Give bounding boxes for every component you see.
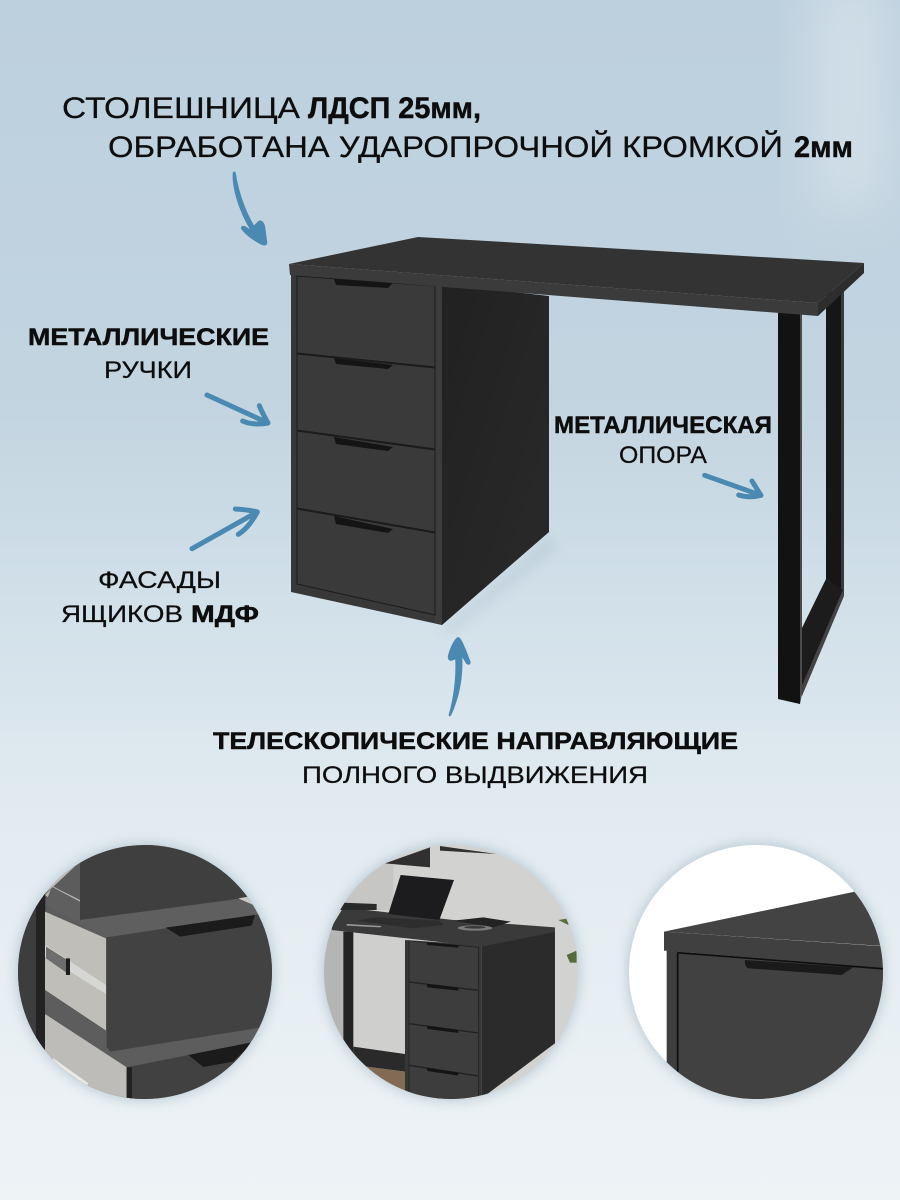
- label: telescopic slides: ТЕЛЕСКОПИЧЕСКИЕ НАПРАВЛЯЮЩИЕ: [213, 728, 738, 755]
- label: telescopic slides: ПОЛНОГО ВЫДВИЖЕНИЯ: [302, 762, 648, 789]
- title: [62, 92, 853, 164]
- title: СТОЛЕШНИЦА: [62, 92, 300, 125]
- drawers: [297, 276, 435, 615]
- label: metal support: МЕТАЛЛИЧЕСКАЯ: [554, 412, 772, 439]
- arrow: tabletop: [233, 171, 267, 245]
- label: telescopic slides: [213, 728, 738, 789]
- circle: handle close-up: [622, 838, 890, 1106]
- label: drawer fronts: ФАСАДЫ: [98, 567, 221, 594]
- label: drawer fronts: ЯЩИКОВ: [61, 601, 183, 628]
- tabletop front edge: [289, 264, 818, 316]
- back leg: [826, 288, 844, 595]
- drawer 3: [297, 431, 435, 532]
- drawer 4: [297, 509, 435, 615]
- label: drawer fronts: МДФ: [191, 601, 259, 628]
- label: metal handles: [28, 324, 269, 384]
- tabletop side edge: [818, 263, 864, 316]
- desk: [289, 237, 864, 704]
- soft shadow: [442, 535, 556, 634]
- arrow: drawer fronts: [192, 509, 257, 549]
- front leg: [778, 312, 802, 704]
- leg bottom bar: [800, 579, 843, 692]
- handles: [334, 279, 393, 533]
- drawer 1: [297, 276, 435, 367]
- arrow: support: [705, 475, 761, 497]
- title: 2мм: [794, 131, 853, 164]
- drawer 2: [297, 354, 435, 449]
- tabletop surface: [289, 237, 864, 303]
- circle: desk in interior: [317, 838, 585, 1106]
- title: ЛДСП 25мм,: [308, 92, 481, 125]
- label: metal handles: МЕТАЛЛИЧЕСКИЕ: [28, 324, 269, 351]
- cabinet front frame: [291, 272, 442, 625]
- circle: open drawer detail: [11, 838, 279, 1106]
- label: metal handles: РУЧКИ: [104, 357, 192, 384]
- arrow: slides: [448, 637, 471, 716]
- arrow: handles: [207, 395, 268, 424]
- title: ОБРАБОТАНА УДАРОПРОЧНОЙ КРОМКОЙ: [108, 130, 783, 164]
- cabinet side: [442, 284, 549, 625]
- label: drawer fronts: [61, 567, 259, 628]
- label: metal support: ОПОРА: [619, 442, 707, 469]
- label: metal support: [554, 412, 772, 469]
